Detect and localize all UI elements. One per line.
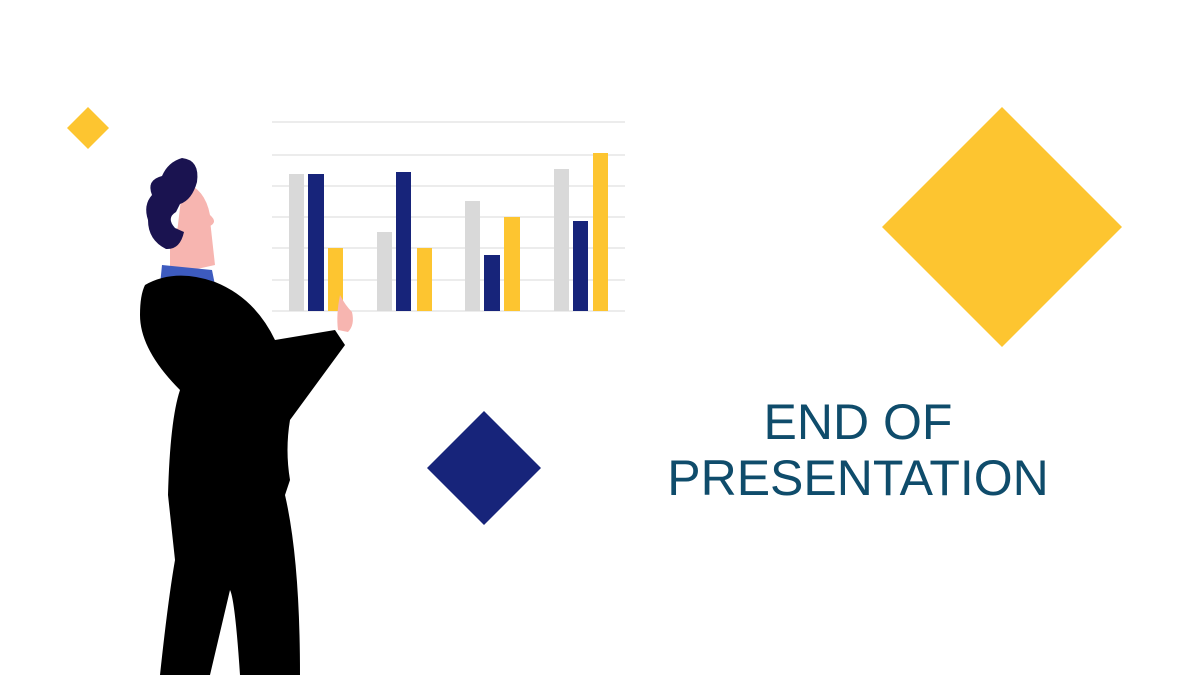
title [667, 394, 1049, 506]
icon: small yellow diamond [67, 107, 109, 149]
bar chart [272, 122, 625, 311]
icon: large yellow diamond [882, 107, 1122, 347]
title: END OF [764, 394, 952, 450]
icon: navy diamond [427, 411, 541, 525]
title: PRESENTATION [667, 450, 1049, 506]
person [140, 158, 353, 675]
